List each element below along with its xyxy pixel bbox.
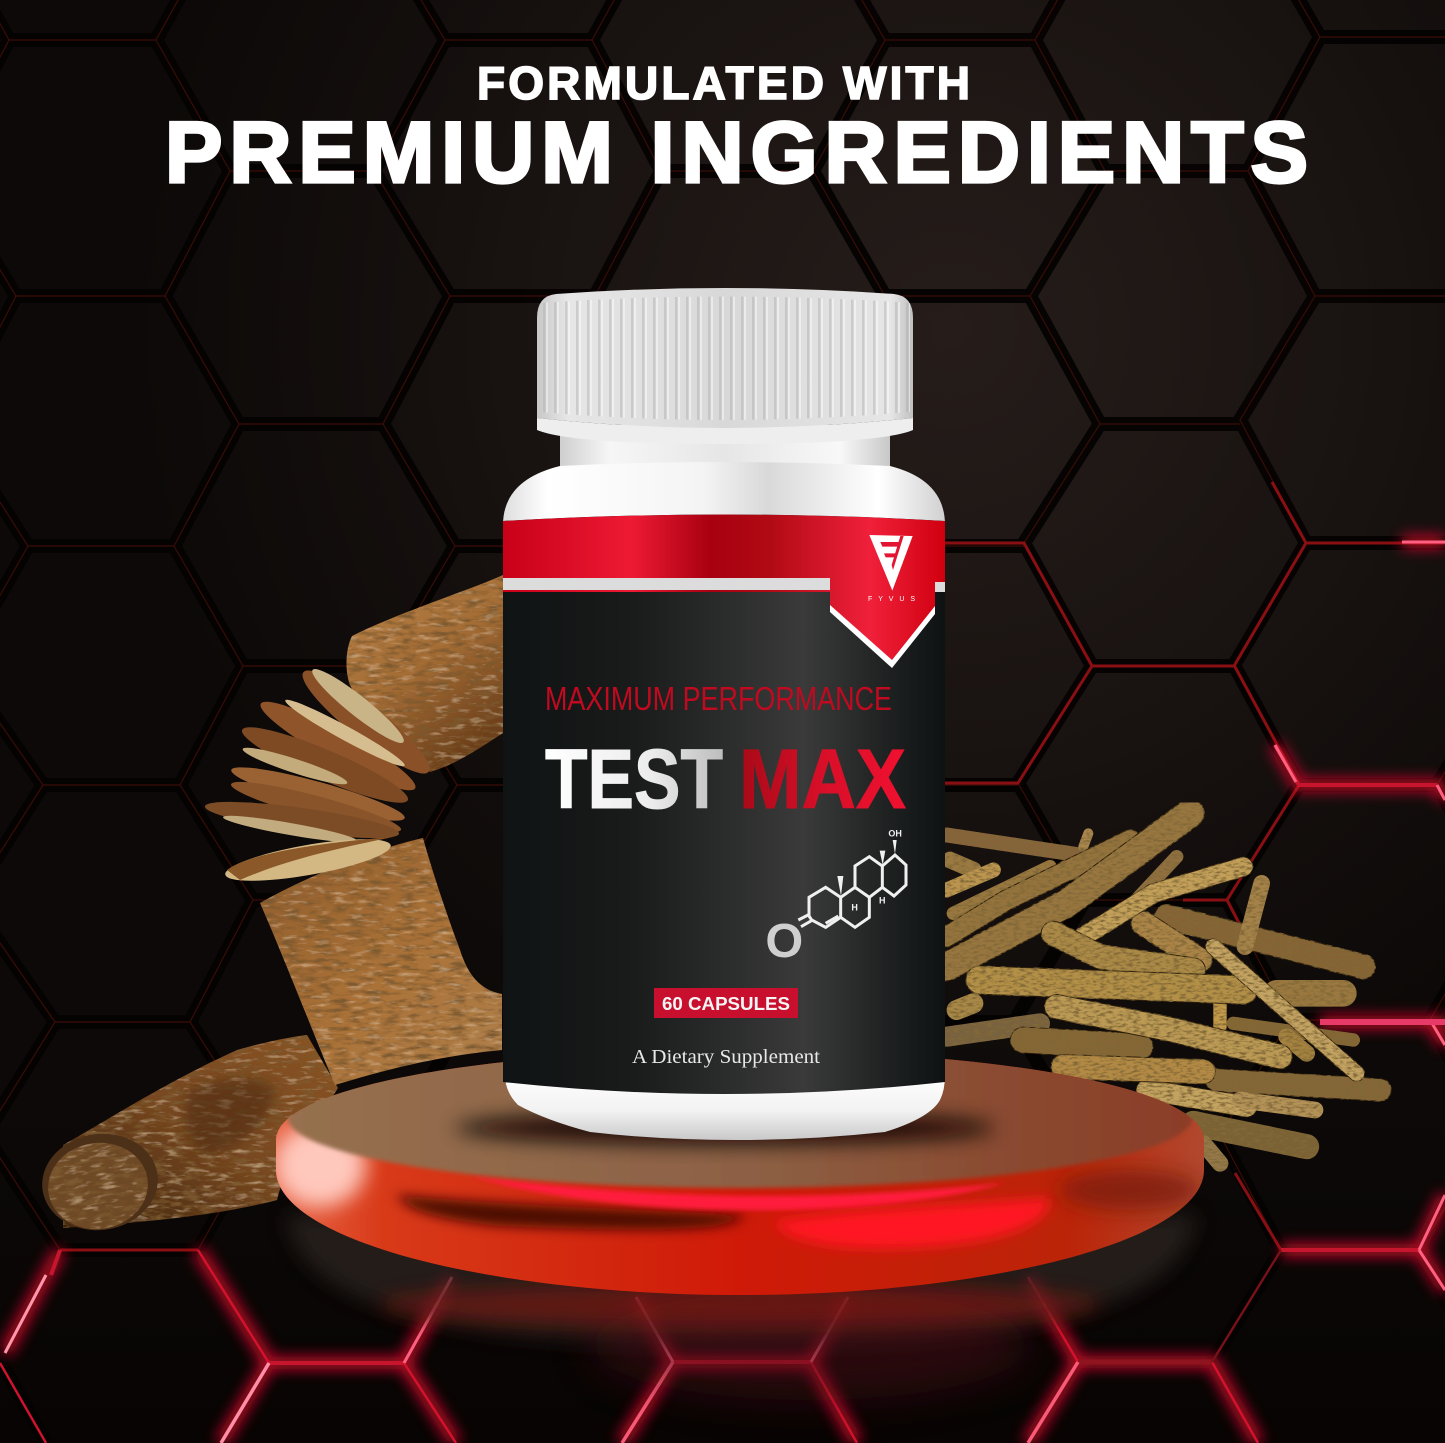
capsule count badge: 60 CAPSULES xyxy=(662,993,790,1014)
red label band xyxy=(503,514,945,592)
platform side and top xyxy=(276,1059,1204,1295)
black label xyxy=(503,514,945,1094)
testosterone molecule: H xyxy=(851,903,858,913)
label tagline: MAXIMUM PERFORMANCE xyxy=(545,680,892,717)
cap xyxy=(537,288,913,444)
capsule count badge xyxy=(654,988,798,1018)
testosterone molecule: O xyxy=(765,914,803,968)
testosterone molecule: H xyxy=(879,895,885,905)
bottle contact shadow xyxy=(455,1112,995,1144)
product name xyxy=(545,732,906,826)
testosterone molecule: OH xyxy=(888,829,902,839)
brand logo: FYVUS: FYVUS xyxy=(868,596,915,603)
testosterone molecule xyxy=(765,829,906,968)
heading line one: FORMULATED WITH xyxy=(477,57,970,109)
ingredient: sliced cassava root xyxy=(36,575,503,1238)
white stripe xyxy=(503,578,945,592)
platform reflection on floor xyxy=(285,1215,1198,1400)
red platform xyxy=(276,1059,1204,1295)
shoulder xyxy=(503,462,945,525)
title xyxy=(165,57,1308,201)
red pennant xyxy=(830,570,935,668)
bottle base xyxy=(505,1075,945,1140)
ingredient: pile of dried ashwagandha roots xyxy=(947,813,1380,1163)
product name: TEST xyxy=(545,732,723,826)
product bottle xyxy=(503,288,945,1140)
long root lying down xyxy=(36,1035,338,1238)
brand logo: FYVUS xyxy=(868,535,915,603)
bottle neck xyxy=(560,425,890,472)
root slices xyxy=(203,659,439,889)
heading line two: PREMIUM INGREDIENTS xyxy=(165,105,1308,201)
glowing floor and wall light strips xyxy=(0,542,1445,1443)
lower trunk xyxy=(260,838,502,1085)
dietary supplement line: A Dietary Supplement xyxy=(632,1046,820,1068)
upper trunk xyxy=(346,575,503,772)
product name: MAX xyxy=(739,732,906,826)
